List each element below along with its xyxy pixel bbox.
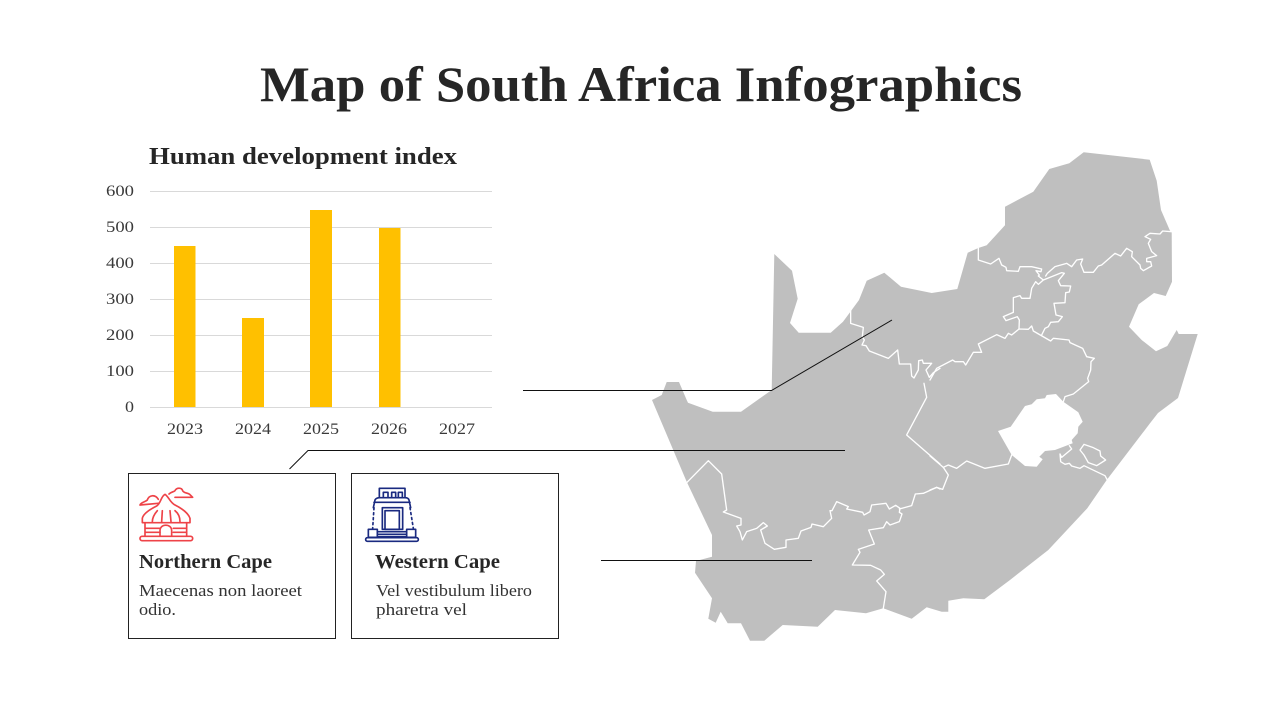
bar chart: human development index: 600 [106, 183, 134, 200]
bar chart: human development index: 400 [106, 255, 134, 272]
card body text: Vel vestibulum libero [376, 581, 532, 600]
map: central provincial borders [851, 310, 940, 378]
card heading: Western Cape [375, 551, 500, 573]
bar chart: human development index: 2026 [371, 421, 407, 438]
bar chart: human development index [106, 183, 492, 438]
map: Lesotho cut-out [998, 394, 1083, 467]
card body text: Maecenas non laoreet [139, 581, 302, 600]
bar chart: human development index: 2023 [167, 421, 203, 438]
card body text: pharetra vel [376, 600, 467, 619]
bar chart: human development index: 100 [106, 363, 134, 380]
bar chart: human development index: 300 [106, 291, 134, 308]
map: country silhouette [652, 152, 1198, 641]
leader line: Western Cape [601, 560, 812, 562]
bar chart: human development index: 0 [125, 399, 134, 416]
card body text: odio. [139, 600, 176, 619]
map: north-eastern provincial borders [930, 231, 1172, 402]
bar chart: human development index: 200 [106, 327, 134, 344]
bar chart: human development index: 2025 [303, 421, 339, 438]
map of South Africa [652, 152, 1198, 641]
chart heading: Human development index [149, 143, 458, 170]
map: south-eastern provincial borders [930, 444, 1107, 490]
bar chart: human development index: 500 [106, 219, 134, 236]
title: Map of South Africa Infographics [260, 56, 1022, 112]
bar chart: human development index: 2024 [235, 421, 271, 438]
card body text [376, 581, 532, 619]
leader line: top [523, 320, 892, 390]
icon: monument [366, 488, 418, 541]
icon: hut [140, 488, 193, 541]
leader line: Northern Cape card [290, 450, 845, 469]
panel: Northern Cape [128, 474, 336, 638]
bar chart: human development index: 2027 [439, 421, 475, 438]
card heading: Northern Cape [139, 551, 272, 573]
card body text [139, 581, 302, 619]
panel: Western Cape [352, 474, 558, 638]
map: southern provincial borders [687, 383, 940, 608]
